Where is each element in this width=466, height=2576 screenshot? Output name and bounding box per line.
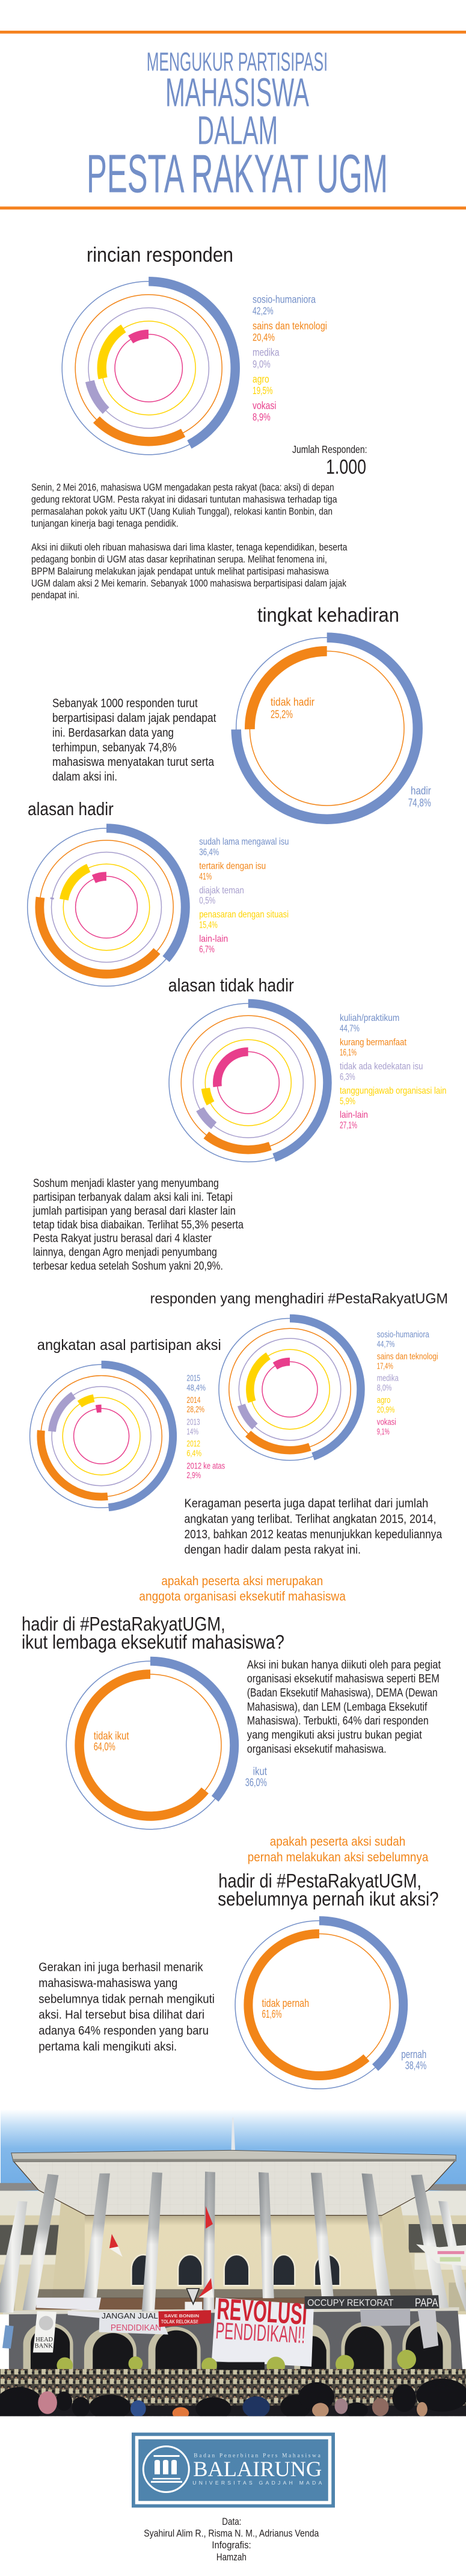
legend: angkatan: 2013 [186, 1417, 200, 1427]
text block: gerakan: sebelumnya tidak pernah mengikuti [38, 1992, 215, 2006]
label: tidak hadir: tidak hadir [271, 695, 314, 708]
legend: responden yang menghadiri: 8,0% [377, 1383, 392, 1393]
banner: left white [36, 2297, 101, 2310]
label: pernah: 38,4% [405, 2059, 426, 2071]
logo: Balairung [132, 2433, 335, 2507]
banner: head bank: HEAD [35, 2336, 53, 2343]
legend: angkatan: 6,4% [186, 1449, 201, 1459]
text block: organisasi eksekutif [247, 1658, 441, 1755]
banner: revolusi pendidikan [212, 2292, 314, 2367]
text block: gerakan [38, 1961, 215, 2053]
legend: rincian responden [253, 293, 327, 423]
chart: angkatan rings [30, 1364, 173, 1508]
credits [144, 2516, 319, 2563]
legend: alasan hadir [199, 837, 289, 955]
legend: angkatan: 2012 [186, 1439, 200, 1449]
banner: occupy rektorat: PAPA [415, 2296, 438, 2309]
total respondents callout [292, 443, 367, 478]
text block: intro: pendapat ini. [31, 590, 79, 601]
legend: alasan tidak hadir: tidak ada kedekatan isu [340, 1061, 423, 1072]
chart: responden yang menghadiri rings [219, 1319, 361, 1461]
heading: tingkat kehadiran: tingkat kehadiran [257, 604, 399, 626]
text block: soshum: Pesta Rakyat justru berasal dari 4 klaster [33, 1232, 212, 1245]
legend: responden yang menghadiri: 9,1% [377, 1426, 390, 1437]
column shading [35, 2172, 435, 2243]
text block: keragaman: dengan hadir dalam pesta rakyat ini. [184, 1543, 361, 1557]
legend: rincian responden: 8,9% [253, 411, 271, 423]
question: aksi sebelumnya [248, 1835, 429, 1864]
heading: rincian responden: rincian responden [87, 244, 233, 267]
label: tidak pernah: tidak pernah [262, 1997, 309, 2009]
label: hadir: hadir [411, 784, 431, 797]
legend: alasan tidak hadir: 44,7% [340, 1023, 360, 1034]
text block: soshum: lainnya, dengan Agro menjadi penyumbang [33, 1245, 217, 1259]
banner: head bank: BANK [34, 2342, 53, 2350]
legend: responden yang menghadiri: agro [377, 1395, 391, 1405]
banner: save bonbin: TOLAK RELOKASI! [161, 2319, 198, 2325]
legend: angkatan: 2015 [186, 1373, 200, 1384]
text block: gerakan: pertama kali mengikuti aksi. [38, 2039, 177, 2053]
text block: soshum: partisipan terbanyak dalam aksi kali ini. Tetapi [33, 1191, 233, 1204]
title: MAHASISWA [165, 70, 309, 116]
text block: kehadiran: dalam aksi ini. [52, 771, 117, 784]
legend: alasan tidak hadir: kurang bermanfaat [340, 1037, 406, 1048]
legend: alasan hadir: 0,5% [199, 896, 215, 906]
top orange rule [0, 31, 466, 34]
title: MENGUKUR PARTISIPASI [147, 47, 328, 76]
legend: responden yang menghadiri: sains dan teknologi [377, 1351, 438, 1361]
text block: soshum [32, 1177, 244, 1272]
label: tidak hadir: 25,2% [271, 707, 293, 720]
text block: intro: gedung rektorat UGM. Pesta rakyat ini didasari tuntutan mahasiswa terhadap tiga [31, 493, 337, 505]
chart: rincian responden rings [62, 282, 235, 455]
crowd [0, 2362, 466, 2416]
legend: responden yang menghadiri: sosio-humaniora [377, 1330, 429, 1340]
title: DALAM [197, 108, 278, 153]
label: tidak pernah [262, 1997, 309, 2020]
legend: rincian responden: sosio-humaniora [253, 293, 316, 305]
label: tidak ikut: tidak ikut [94, 1729, 129, 1742]
text block: gerakan: adanya 64% responden yang baru [38, 2024, 209, 2038]
label: tidak ikut [94, 1729, 129, 1752]
text block: organisasi eksekutif: Mahasiswa). Terbukti, 64% dari responden [247, 1715, 429, 1728]
legend: rincian responden: medika [253, 346, 280, 358]
text block: soshum: terbesar kedua setelah Soshum yakni 20,9%. [33, 1259, 223, 1272]
text block: kehadiran: berpartisipasi dalam jajak pendapat [52, 712, 216, 725]
label: hadir: 74,8% [408, 797, 431, 809]
heading: ikut lembaga eksekutif: ikut lembaga eksekutif mahasiswa? [22, 1632, 284, 1653]
label: pernah: pernah [401, 2048, 426, 2060]
text block: gerakan: Gerakan ini juga berhasil menarik [38, 1961, 203, 1974]
chart: ikut lembaga rings [66, 1661, 235, 1829]
legend: angkatan: 28,2% [186, 1405, 204, 1415]
legend: rincian responden: 42,2% [253, 304, 274, 316]
legend: angkatan: 2,9% [186, 1470, 201, 1481]
label: pernah [401, 2048, 426, 2071]
text block: organisasi eksekutif: Mahasiswa), dan LEM (Lembaga Eksekutif [247, 1700, 428, 1713]
legend: rincian responden: sains dan teknologi [253, 319, 327, 331]
heading: angkatan asal partisipan aksi: angkatan asal partisipan aksi [37, 1337, 221, 1354]
banner: head bank [33, 2311, 57, 2353]
bushes [57, 2350, 416, 2369]
question: aksi sebelumnya: pernah melakukan aksi sebelumnya [248, 1850, 429, 1864]
legend: alasan tidak hadir: kuliah/praktikum [340, 1013, 399, 1023]
question: anggota organisasi: apakah peserta aksi merupakan [161, 1574, 323, 1588]
legend: alasan tidak hadir: lain-lain [340, 1110, 368, 1120]
text block: keragaman: angkatan yang terlibat. Terlihat angkatan 2015, 2014, [184, 1512, 437, 1526]
heading: responden yang menghadiri: responden yang menghadiri #PestaRakyatUGM [150, 1291, 448, 1307]
legend: angkatan: 2012 ke atas [186, 1461, 225, 1471]
legend: rincian responden: 9,0% [253, 358, 271, 370]
logo: Balairung: BALAIRUNG [193, 2457, 322, 2481]
banner: save bonbin [158, 2310, 211, 2327]
legend: alasan hadir: sudah lama mengawal isu [199, 837, 289, 847]
question: anggota organisasi: anggota organisasi eksekutif mahasiswa [139, 1590, 346, 1604]
legend: alasan hadir: 6,7% [199, 944, 215, 955]
title [87, 47, 388, 204]
label: ikut: 36,0% [245, 1776, 267, 1789]
legend: responden yang menghadiri: 17,4% [377, 1361, 393, 1371]
text block: soshum: jumlah partisipan yang berasal dari klaster lain [32, 1204, 236, 1218]
stone base [9, 2309, 462, 2371]
label: tidak hadir [271, 695, 314, 720]
legend: responden yang menghadiri: 44,7% [377, 1339, 394, 1349]
heading: ikut lembaga eksekutif [22, 1613, 284, 1653]
total respondents callout: 1.000 [326, 455, 366, 478]
banner: occupy rektorat: OCCUPY REKTORAT [307, 2298, 394, 2308]
logo: Balairung: UNIVERSITAS GADJAH MADA [192, 2480, 322, 2486]
balcony railing [35, 2297, 305, 2310]
text block: organisasi eksekutif: organisasi eksekutif mahasiswa. [247, 1742, 387, 1755]
legend: responden yang menghadiri: medika [377, 1373, 399, 1384]
legend: alasan hadir: 41% [199, 872, 212, 882]
label: ikut [245, 1765, 267, 1789]
chart: pernah ikut aksi rings [235, 1921, 403, 2089]
legend: alasan tidak hadir: 5,9% [340, 1096, 355, 1106]
credits: Hamzah [216, 2552, 247, 2563]
legend: alasan hadir: lain-lain [199, 934, 228, 944]
credits: Infografis: [212, 2540, 251, 2551]
legend: angkatan: 14% [186, 1426, 198, 1437]
legend: angkatan: 48,4% [186, 1382, 206, 1393]
banner: revolusi pendidikan: REVOLUSI [216, 2292, 308, 2331]
legend: responden yang menghadiri [377, 1330, 438, 1437]
chart: tingkat kehadiran rings [236, 638, 418, 819]
text block: intro: UGM dalam aksi 2 Mei kemarin. Sebanyak 1000 mahasiswa berpartisipasi dalam jajak [31, 578, 346, 589]
legend: angkatan: 2014 [186, 1395, 201, 1405]
text block: intro: Senin, 2 Mei 2016, mahasiswa UGM mengadakan pesta rakyat (baca: aksi) di depan [31, 482, 334, 493]
text block: intro: Aksi ini diikuti oleh ribuan mahasiswa dari lima klaster, tenaga kependidikan, beserta [31, 541, 348, 553]
legend: rincian responden: 19,5% [253, 384, 273, 396]
text block: kehadiran [52, 697, 216, 784]
heading: pernah ikut aksi: sebelumnya pernah ikut aksi? [218, 1888, 439, 1909]
text block: soshum: Soshum menjadi klaster yang menyumbang [33, 1177, 219, 1190]
legend: alasan tidak hadir [340, 1013, 446, 1130]
legend: alasan hadir: 15,4% [199, 920, 218, 931]
banner: revolusi pendidikan: PENDIDIKAN!! [215, 2318, 306, 2349]
banner: save bonbin: SAVE BONBIN [164, 2313, 199, 2319]
heading: pernah ikut aksi [218, 1870, 439, 1909]
legend: responden yang menghadiri: vokasi [377, 1417, 396, 1427]
credits: Data: [222, 2516, 241, 2527]
illustration: protest at UGM rectorate building [0, 2106, 466, 2424]
small UGM sign [185, 2302, 202, 2311]
legend: alasan tidak hadir: tanggungjawab organisasi lain [340, 1086, 446, 1096]
arched windows [131, 2255, 340, 2285]
text block: intro: pedagang bonbin di UGM atas dasar keprihatinan serupa. Melihat fenomena ini, [31, 553, 327, 565]
bottom orange rule [0, 206, 466, 209]
question: aksi sebelumnya: apakah peserta aksi sudah [270, 1835, 405, 1849]
banner: occupy rektorat [305, 2295, 440, 2309]
legend: alasan tidak hadir: 16,1% [340, 1048, 357, 1058]
arches [23, 2320, 451, 2370]
legend: alasan hadir: tertarik dengan isu [199, 861, 266, 871]
text block: gerakan: aksi. Hal tersebut bisa dilihat dari [38, 2008, 204, 2022]
label: tidak ikut: 64,0% [94, 1740, 115, 1752]
legend: alasan tidak hadir: 6,3% [340, 1072, 355, 1082]
foreground heads [0, 2406, 466, 2417]
label: ikut: ikut [253, 1765, 267, 1778]
total respondents callout: Jumlah Responden: [292, 443, 367, 455]
banner: jangan jual pendidikan: JANGAN JUAL [102, 2311, 158, 2320]
text block: intro: tunjangan kinerja bagi tenaga pendidik. [31, 517, 179, 529]
columns [0, 2172, 466, 2313]
text block: keragaman [184, 1496, 443, 1557]
heading: alasan hadir: alasan hadir [28, 798, 114, 819]
label: hadir [408, 784, 431, 809]
label: tidak pernah: 61,6% [262, 2007, 282, 2020]
text block: kehadiran: mahasiswa menyatakan turut serta [52, 756, 215, 769]
legend: rincian responden: vokasi [253, 399, 277, 411]
legend: alasan hadir: 36,4% [199, 848, 219, 858]
text block: keragaman: Keragaman peserta juga dapat terlihat dari jumlah [184, 1496, 428, 1510]
legend: angkatan [186, 1373, 225, 1481]
banner: jangan jual pendidikan: PENDIDIKAN [111, 2323, 161, 2333]
legend: alasan hadir: penasaran dengan situasi [199, 910, 289, 920]
text block: intro: permasalahan pokok yaitu UKT (Uang Kuliah Tunggal), relokasi kantin Bonbin, dan [31, 505, 333, 517]
text block: intro [31, 482, 348, 601]
text block: kehadiran: Sebanyak 1000 responden turut [52, 697, 198, 710]
chart: alasan hadir rings [28, 828, 185, 986]
legend: rincian responden: 20,4% [253, 331, 275, 343]
legend: rincian responden: agro [253, 373, 269, 385]
text block: intro: BPPM Balairung melakukan jajak pendapat untuk melihat partisipasi mahasiswa [31, 565, 329, 577]
logo emblem [143, 2446, 189, 2492]
text block: organisasi eksekutif: yang mengikuti aksi justru bukan pegiat [247, 1728, 422, 1742]
text block: kehadiran: terhimpun, sebanyak 74,8% [52, 741, 177, 754]
legend: alasan tidak hadir: 27,1% [340, 1120, 357, 1130]
legend: alasan hadir: diajak teman [199, 886, 244, 896]
question: anggota organisasi [139, 1574, 346, 1604]
heading: alasan tidak hadir: alasan tidak hadir [168, 975, 294, 996]
flags [109, 2206, 213, 2297]
text block: kehadiran: ini. Berdasarkan data yang [52, 726, 174, 739]
credits: Syahirul Alim R., Risma N. M., Adrianus Venda [144, 2528, 319, 2539]
logo: Balairung: Badan Penerbitan Pers Mahasiswa [194, 2453, 321, 2459]
legend: responden yang menghadiri: 20,9% [377, 1405, 394, 1415]
text block: gerakan: mahasiswa-mahasiswa yang [38, 1976, 177, 1990]
text block: soshum: tetap tidak bisa diabaikan. Terlihat 55,3% peserta [33, 1218, 244, 1231]
heading: pernah ikut aksi: hadir di #PestaRakyatUGM, [218, 1870, 422, 1891]
banner: jangan jual pendidikan [99, 2311, 168, 2335]
chart: alasan tidak hadir rings [169, 1003, 328, 1162]
heading: ikut lembaga eksekutif: hadir di #PestaRakyatUGM, [22, 1613, 225, 1635]
